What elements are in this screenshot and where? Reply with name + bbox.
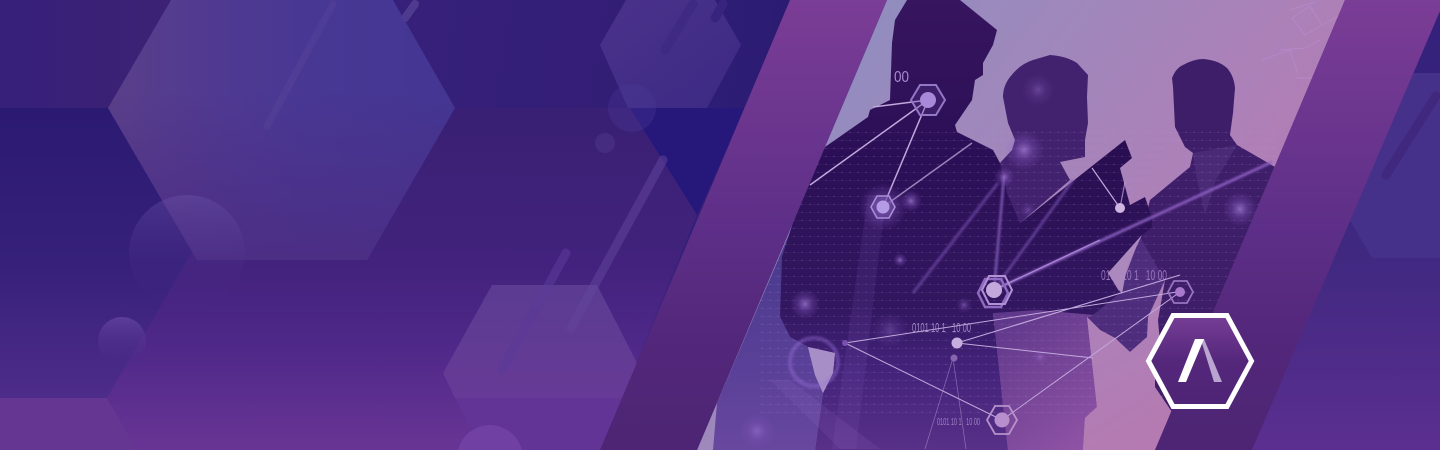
- lower left purple area: [713, 232, 823, 450]
- node: centre small dot: [952, 338, 962, 348]
- binary label near neck: 00: [894, 69, 909, 86]
- upper right hexagon: [600, 0, 741, 108]
- node: right hexagon: [1168, 281, 1193, 303]
- panel: right background: [1300, 13, 1440, 340]
- decorative circles: [98, 84, 656, 450]
- lens flare ring: [790, 338, 838, 386]
- panel: diagonal band left: [600, 0, 887, 450]
- decorative rounded lines: [267, 4, 723, 370]
- right hexagon: [1350, 73, 1440, 258]
- binary label right: 0101 10 1 10 00: [1101, 267, 1167, 284]
- node: centre hexagon: [978, 276, 1012, 307]
- node: neck hexagon: [911, 85, 945, 115]
- tablet and dark torso: [993, 140, 1152, 315]
- network lines: [810, 100, 1272, 449]
- large hexagon: [108, 0, 455, 260]
- pale gap by the arm: [808, 347, 835, 393]
- light beam: [837, 195, 883, 428]
- silhouette: centre man: [993, 55, 1088, 313]
- right man hand: [1087, 237, 1165, 352]
- node: faint dot: [950, 354, 958, 362]
- logo lambda light stroke: [1201, 339, 1222, 382]
- right rounded line: [1386, 96, 1436, 175]
- node: left dot: [842, 340, 848, 346]
- panel: diagonal band right: [1155, 0, 1440, 450]
- faint wire structure: [1262, 2, 1340, 78]
- node: bottom hexagon: [987, 406, 1017, 434]
- pale gap right of hands: [1083, 280, 1172, 450]
- icon: logo hexagon: [1148, 316, 1252, 406]
- dot grid texture: [760, 130, 1275, 420]
- binary label bottom: 0101 10 1 10 00: [937, 416, 980, 428]
- silhouette: right man: [1140, 59, 1275, 420]
- lower body of centre man: [993, 310, 1097, 450]
- diagonal flare streak: [770, 380, 880, 449]
- logo lambda white stroke: [1178, 339, 1204, 382]
- node: chest hexagon: [862, 186, 904, 228]
- silhouette: left man: [780, 0, 1020, 450]
- panel: photo with silhouettes: [697, 0, 1345, 450]
- lower hexagon: [443, 285, 637, 450]
- binary label centre: 0101 10 1 10 00: [912, 321, 971, 335]
- glow spots: [739, 74, 1257, 449]
- node: tablet dot: [1115, 203, 1125, 213]
- right man shirt and tie: [1193, 145, 1237, 215]
- pale gap by the hands: [1108, 235, 1142, 294]
